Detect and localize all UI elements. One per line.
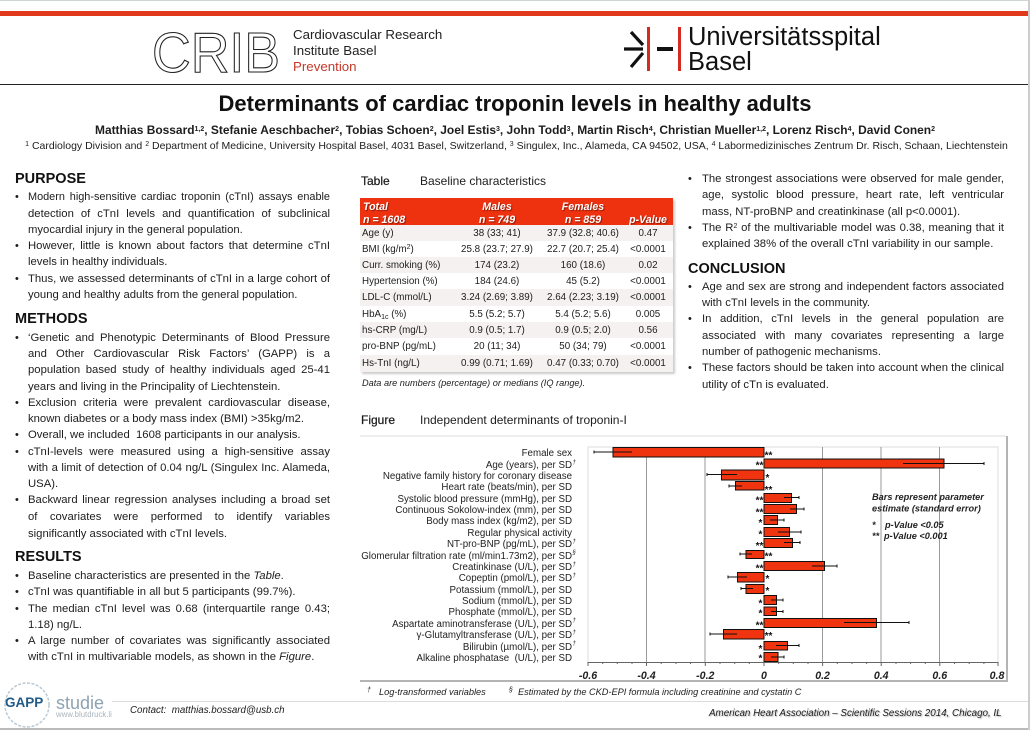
table row: pro-BNP: pro-BNP (pg/mL) (362, 341, 436, 352)
logo: CRIB Cardiovascular Research Institute Basel (152, 24, 442, 78)
heading: results: RESULTS (15, 549, 82, 565)
table row: hypertension: <0.0001 (630, 276, 666, 287)
panel: purpose: • (15, 191, 19, 203)
panel: conclusion: Age and sex are strong and independent factors associated (702, 281, 1004, 293)
bar: heart rate (736, 482, 764, 490)
table row: hs-CRP: 0.56 (638, 325, 658, 336)
panel: methods: • (15, 332, 19, 344)
significance markers: ** (756, 496, 763, 506)
bar: physical activity (764, 528, 790, 536)
panel: methods: Backward linear regression analyses including a broad set (28, 494, 330, 506)
table row: hypertension: 45 (5.2) (566, 276, 600, 287)
panel: conclusion (688, 261, 1004, 391)
significance markers: ** (756, 620, 763, 632)
panel: results: cTnI was quantifiable in all but 5 participants (99.7%). (28, 586, 296, 598)
table row: HbA1c: HbA1c (%) (362, 309, 406, 321)
panel: results continued: The R2 of the multivariable model was 0.38, meaning that it (702, 222, 1004, 234)
table row: smoking: 0.02 (638, 260, 658, 271)
table header row: n = 859 (565, 214, 601, 226)
table row: LDL-C: LDL-C (mmol/L) (362, 292, 432, 303)
significance markers: ** (756, 460, 763, 472)
variable labels: Regular physical activity (467, 528, 572, 539)
transformation markers: † (572, 539, 576, 545)
panel: purpose: young and healthy adults from the general population. (28, 289, 297, 301)
panel: conclusion: • (688, 362, 692, 374)
chart legend note: Bars represent parameter (872, 492, 984, 502)
transformation markers: † (572, 630, 576, 636)
panel: methods: known diabetes or a body mass index (BMI) >35kg/m2. (28, 413, 304, 425)
table row: LDL-C (360, 289, 673, 306)
bar: AST (764, 618, 876, 628)
significance markers: ** (756, 541, 763, 552)
panel: results: with cTnI in multivariable models, as shown in the Figure. (28, 651, 314, 663)
bar: alkaline phosphatase (764, 652, 778, 662)
panel: methods: • (15, 429, 19, 441)
variable labels: Sodium (mmol/L), per SD (462, 596, 572, 607)
bar: NT-pro-BNP (764, 538, 792, 548)
panel: conclusion: These factors should be taken into account when the clinical (702, 362, 1004, 374)
variable labels: Systolic blood pressure (mmHg), per SD (398, 494, 572, 505)
table row: hs-CRP: 0.9 (0.5; 1.7) (469, 325, 525, 336)
logo: Universitätsspital Basel (624, 23, 881, 76)
panel: purpose: myocardial injury in the general population. (28, 224, 243, 236)
title: Determinants of cardiac troponin levels in healthy adults (219, 91, 811, 116)
variable labels: Negative family history for coronary disease (383, 471, 572, 482)
significance markers: * (759, 518, 763, 529)
panel: conclusion: In addition, cTnI levels in the general population are (702, 313, 1004, 325)
significance markers: ** (756, 564, 763, 574)
x axis: 0.2 (815, 670, 830, 682)
table header row: Total (363, 201, 388, 213)
figure footnotes: † (367, 687, 371, 694)
x axis: -0.2 (696, 670, 715, 682)
chart legend note: ** (872, 531, 880, 541)
table row: age: Age (y) (362, 228, 394, 239)
table row: BMI: 22.7 (20.7; 25.4) (547, 244, 619, 255)
table header row: n = 1608 (363, 214, 405, 226)
chart legend note: p-Value <0.05 (884, 520, 945, 530)
table row: LDL-C: <0.0001 (630, 292, 666, 303)
panel: purpose: • (15, 240, 19, 252)
figure footnotes: § (509, 687, 513, 694)
bar: family history (722, 470, 764, 480)
variable labels: Phosphate (mmol/L), per SD (448, 607, 572, 618)
header rule (0, 84, 1030, 85)
table row: smoking: Curr. smoking (%) (362, 260, 440, 271)
bar: sodium (764, 596, 776, 604)
heading: methods: METHODS (15, 311, 88, 327)
hospital name: Basel (688, 48, 752, 76)
panel: results continued: • (688, 173, 692, 185)
chart legend note: estimate (standard error) (872, 504, 981, 514)
institute name: Institute Basel (293, 43, 377, 58)
panel: conclusion: with cTnI levels in the community. (702, 297, 870, 309)
GAPP ring (4, 682, 50, 728)
bar: age (764, 459, 944, 468)
table row: age: 37.9 (32.8; 40.6) (547, 228, 619, 239)
bar: BMI (764, 516, 778, 524)
variable labels: Bilirubin (µmol/L), per SD (463, 642, 572, 653)
hospital name: Universitätsspital (688, 23, 881, 51)
panel: conclusion: • (688, 281, 692, 293)
panel: methods: • (15, 397, 19, 409)
significance markers: ** (756, 508, 763, 518)
significance markers: * (759, 530, 763, 540)
bar: potassium (746, 584, 764, 594)
figure heading: Figure (361, 413, 395, 427)
transformation markers: † (572, 573, 576, 579)
chart legend note: p-Value <0.001 (883, 531, 948, 541)
significance markers: * (766, 473, 770, 484)
panel: results: • (15, 570, 19, 582)
bar: GFR (746, 550, 764, 558)
figure footnotes (367, 686, 802, 697)
table row: BMI: 25.8 (23.7; 27.9) (461, 244, 533, 255)
significance markers: * (759, 598, 763, 610)
chart legend note: * (872, 520, 876, 530)
bar: female sex (613, 448, 764, 457)
bar: bilirubin (764, 642, 788, 650)
variable labels: Female sex (522, 448, 572, 459)
table header row: n = 749 (479, 214, 515, 226)
panel: purpose: • (15, 273, 19, 285)
table row: Hs-TnI: 0.99 (0.71; 1.69) (461, 358, 533, 369)
panel: purpose: However, little is known about factors that determine cTnI (28, 240, 330, 252)
table row: Hs-TnI: <0.0001 (630, 358, 666, 369)
panel: results continued: explained 38% of the overall cTnI variability in our sample. (702, 238, 993, 250)
variable labels: Potassium (mmol/L), per SD (450, 585, 572, 596)
panel: methods: Exclusion criteria were prevalent cardiovascular disease, (28, 397, 330, 409)
table: baseline characteristics (360, 198, 673, 372)
table row: HbA1c (362, 309, 660, 321)
panel: methods: years and living in the Principality of Liechtenstein. (28, 381, 280, 393)
panel: methods: • (15, 446, 19, 458)
chart legend note (872, 492, 984, 541)
table header row: Females (562, 201, 604, 213)
transformation markers: † (572, 562, 576, 568)
panel: purpose: Modern high-sensitive cardiac troponin (cTnI) assays enable (28, 191, 330, 203)
panel: results: A large number of covariates was significantly associated (28, 635, 330, 647)
table footnote: Data are numbers (percentage) or medians (IQ range). (362, 378, 585, 388)
significance markers: * (759, 654, 763, 664)
table row: hypertension (362, 276, 666, 287)
table row: hypertension: Hypertension (%) (362, 276, 438, 287)
chart: independent determinants of troponin-I (360, 436, 1008, 682)
panel: purpose: detection of cTnI levels and quantification of subclinical (28, 208, 330, 220)
panel: purpose: levels in healthy individuals. (28, 256, 167, 268)
variable labels: Glomerular filtration rate (ml/min1.73m2), per SD (361, 551, 572, 562)
table row: Hs-TnI: Hs-TnI (ng/L) (362, 358, 420, 369)
bar: GGT (724, 630, 764, 639)
x axis: 0 (761, 670, 767, 682)
institute name: Prevention (293, 59, 357, 74)
table header row: Males (482, 201, 512, 213)
panel: results continued: The strongest associations were observed for male gender, (702, 173, 1004, 185)
variable labels: NT-pro-BNP (pg/mL), per SD (447, 539, 572, 550)
panel: results: • (15, 603, 19, 615)
bar: copeptin (738, 572, 764, 582)
panel: methods (15, 311, 330, 540)
panel: methods: with a limit of detection of 0.04 ng/L (Singulex Inc. Alameda, (28, 462, 330, 474)
table row: age (360, 225, 673, 241)
table header row (360, 198, 673, 225)
panel: purpose (15, 171, 330, 301)
transformation markers: § (572, 550, 576, 556)
table header row: p-Value (629, 214, 667, 226)
table heading: Table (361, 174, 390, 188)
panel: results: The median cTnI level was 0.68 (interquartile range 0.43; (28, 603, 330, 615)
bar: systolic blood pressure (764, 494, 792, 502)
panel: purpose: Thus, we assessed determinants of cTnI in a large cohort of (28, 273, 330, 285)
significance markers: * (766, 586, 770, 597)
significance markers: ** (765, 485, 772, 496)
institute name (293, 27, 442, 74)
variable labels: Aspartate aminotransferase (U/L), per SD (392, 619, 572, 630)
table row: BMI: <0.0001 (630, 244, 666, 255)
panel: conclusion: number of pathogenic mechanisms. (702, 346, 881, 358)
table row: LDL-C: 3.24 (2.69; 3.89) (461, 292, 533, 303)
panel: methods: population based study of healthy individuals aged 25-41 (28, 364, 330, 376)
x axis (579, 662, 1004, 682)
table row: hypertension: 184 (24.6) (475, 276, 519, 287)
table heading (361, 174, 546, 188)
x axis: 0.8 (990, 670, 1004, 682)
significance markers: * (759, 608, 763, 620)
GAPP lettering: GAPP (5, 695, 43, 710)
panel: methods: significantly associated with cTnI levels. (28, 528, 227, 540)
bar: phosphate (764, 607, 776, 616)
significance markers: ** (765, 552, 772, 562)
table row: age: 38 (33; 41) (473, 228, 521, 239)
bars (613, 448, 944, 662)
affiliations: 1 Cardiology Division and 2 Department of Medicine, University Hospital Basel, 4031 Basel, Switzerland, 3 Singulex, Inc., Alameda, CA 94502, USA, 4 Labormedizinisches Zentrum Dr. Risch, Schaan, Liechtenstein (25, 140, 1008, 152)
table row: age: 0.47 (638, 228, 658, 239)
transformation markers: † (572, 460, 576, 466)
significance markers: ** (765, 631, 772, 642)
panel: results: • (15, 635, 19, 647)
panel: results continued: age, systolic blood pressure, heart rate, left ventricular (702, 189, 1004, 201)
figure heading: Independent determinants of troponin-I (420, 413, 627, 427)
table row: Hs-TnI (360, 355, 673, 372)
variable labels: Heart rate (beats/min), per SD (441, 482, 572, 493)
contact: Contact: matthias.bossard@usb.ch (130, 705, 285, 716)
panel: results continued: mass, NT-proBNP and creatinkinase (all p<0.0001). (702, 206, 960, 218)
panel: methods: and Other Cardiovascular Risk Factors’ (GAPP) is a (28, 348, 330, 360)
variable labels: Alkaline phosphatase (U/L), per SD (416, 653, 572, 664)
x axis: 0.6 (932, 670, 947, 682)
table row: Hs-TnI: 0.47 (0.33; 0.70) (547, 358, 619, 369)
hospital symbol (624, 27, 681, 71)
table row: pro-BNP (362, 341, 666, 352)
hospital name (688, 23, 881, 76)
transformation markers: † (572, 618, 576, 624)
significance markers: * (759, 644, 763, 655)
panel: methods: Overall, we included 1608 participants in our analysis. (28, 429, 301, 441)
table row: BMI: BMI (kg/m2) (362, 244, 414, 255)
bar: creatinkinase (764, 562, 824, 570)
panel: conclusion: • (688, 313, 692, 325)
variable labels: Age (years), per SD (486, 460, 572, 471)
conference credit: American Heart Association – Scientific Sessions 2014, Chicago, IL (709, 708, 1002, 719)
x axis: -0.6 (579, 670, 597, 682)
panel: methods: of covariates were performed to identify variables (28, 511, 330, 523)
variable labels: Body mass index (kg/m2), per SD (426, 516, 572, 527)
table row: smoking: 174 (23.2) (475, 260, 519, 271)
table row: smoking: 160 (18.6) (561, 260, 605, 271)
heading: purpose: PURPOSE (15, 171, 86, 187)
table row: pro-BNP: <0.0001 (630, 341, 666, 352)
table row: hs-CRP: 0.9 (0.5; 2.0) (555, 325, 611, 336)
website: www.blutdruck.li (56, 710, 112, 719)
table row: pro-BNP: 50 (34; 79) (559, 341, 607, 352)
error bars (594, 450, 984, 658)
panel: conclusion: associated with many covariates representing a large (702, 330, 1004, 342)
x axis: 0.4 (874, 670, 889, 682)
panel: results: 1.18) ng/L. (28, 619, 82, 631)
panel: conclusion: utility of cTn is evaluated. (702, 379, 829, 391)
table row: HbA1c: 5.5 (5.2; 5.7) (469, 309, 525, 320)
table row: pro-BNP: 20 (11; 34) (474, 341, 520, 352)
table row: hs-CRP (360, 322, 673, 338)
variable labels (361, 448, 572, 664)
panel: results (15, 549, 330, 663)
table row: hs-CRP: hs-CRP (mg/L) (362, 325, 427, 336)
significance markers: * (766, 574, 770, 585)
transformation markers (572, 460, 576, 647)
panel: results: • (15, 586, 19, 598)
panel: methods: USA). (28, 478, 58, 490)
figure footnotes: Log-transformed variables (379, 687, 486, 697)
heading: conclusion: CONCLUSION (688, 261, 785, 277)
variable labels: Copeptin (pmol/L), per SD (459, 573, 572, 584)
significance markers: ** (765, 450, 772, 462)
variable labels: Continuous Sokolow-index (mm), per SD (395, 505, 572, 516)
table row: smoking (360, 257, 673, 273)
bar: Sokolow index (764, 504, 796, 514)
figure footnotes: Estimated by the CKD-EPI formula including creatinine and cystatin C (518, 687, 801, 697)
variable labels: Creatinkinase (U/L), per SD (452, 562, 572, 573)
x axis: -0.4 (637, 670, 656, 682)
panel: results continued: • (688, 222, 692, 234)
table row: BMI (362, 244, 666, 255)
transformation markers: † (572, 641, 576, 647)
variable labels: γ-Glutamyltransferase (U/L), per SD (416, 630, 572, 641)
authors: Matthias Bossard1,2, Stefanie Aeschbacher2, Tobias Schoen2, Joel Estis3, John Todd3, Martin Risch4, Christian Mueller1,2, Lorenz Risch4, David Conen2 (95, 123, 935, 137)
significance markers (756, 450, 772, 664)
logo: GAPP studie (4, 682, 112, 728)
panel: methods: • (15, 494, 19, 506)
table row: LDL-C: 2.64 (2.23; 3.19) (547, 292, 619, 303)
institute name: Cardiovascular Research (293, 27, 442, 42)
panel: methods: cTnI-levels were measured using a high-sensitive assay (28, 446, 330, 458)
table row: HbA1c: 5.4 (5.2; 5.6) (555, 309, 611, 320)
table heading: Baseline characteristics (420, 174, 546, 188)
panel: results continued (688, 173, 1004, 250)
table row: HbA1c: 0.005 (636, 309, 660, 320)
top red bar (0, 11, 1030, 16)
panel: methods: ‘Genetic and Phenotypic Determinants of Blood Pressure (28, 332, 330, 344)
studie lettering: studie (56, 693, 104, 713)
panel: results: Baseline characteristics are presented in the Table. (28, 570, 284, 582)
